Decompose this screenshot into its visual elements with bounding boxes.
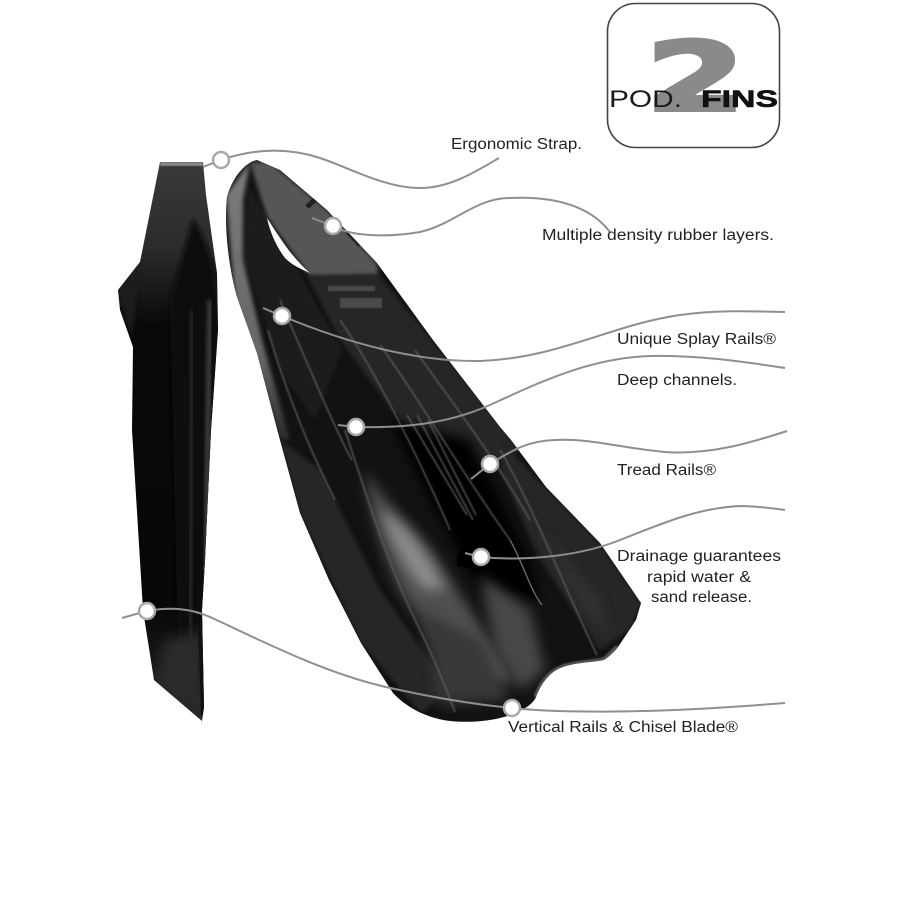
right wing (500, 445, 641, 650)
molded logo (328, 286, 382, 308)
label: deep channels: Deep channels. (617, 372, 737, 389)
central highlight (365, 470, 515, 690)
dark central channel (390, 420, 540, 600)
label: drainage: sand release. (651, 589, 752, 606)
icon: heel strap slit (267, 218, 310, 273)
label: drainage (617, 548, 781, 606)
leader: multiple density (312, 198, 610, 235)
label: unique splay rails: Unique Splay Rails® (617, 331, 777, 348)
label: tread rails: Tread Rails® (617, 462, 717, 479)
leader: drainage (465, 506, 785, 565)
outer lower edge (280, 440, 450, 713)
logo wordmark: POD. (609, 86, 682, 113)
logo badge (608, 4, 780, 148)
leader: tread rails (471, 431, 787, 479)
drain hole (457, 552, 538, 602)
label: vertical rails and chisel blade: Vertical Rails & Chisel Blade® (508, 719, 739, 736)
logo wordmark (609, 86, 778, 113)
label: drainage: rapid water & (647, 569, 752, 586)
label: drainage: Drainage guarantees (617, 548, 781, 565)
notch rim (536, 647, 618, 697)
drain floor (480, 575, 545, 690)
label: ergonomic strap: Ergonomic Strap. (451, 136, 582, 153)
lower heel plate (308, 274, 520, 480)
foot pocket strap area (250, 162, 378, 276)
leader: vertical rails (122, 603, 785, 716)
leader: ergonomic strap (203, 151, 499, 188)
dark pocket beside slit (248, 194, 339, 414)
leader: splay rails (263, 308, 785, 361)
logo wordmark: FINS (701, 86, 778, 113)
rail lines (268, 300, 597, 712)
icon: main fin underside (215, 150, 655, 730)
leader: deep channels (338, 356, 785, 435)
leader lines and markers (122, 151, 787, 716)
label: multiple density rubber layers: Multiple density rubber layers. (542, 227, 774, 244)
icon: side view of fin (118, 162, 218, 721)
left rim (226, 162, 290, 440)
logo numeral 2: 2 (646, 22, 745, 133)
